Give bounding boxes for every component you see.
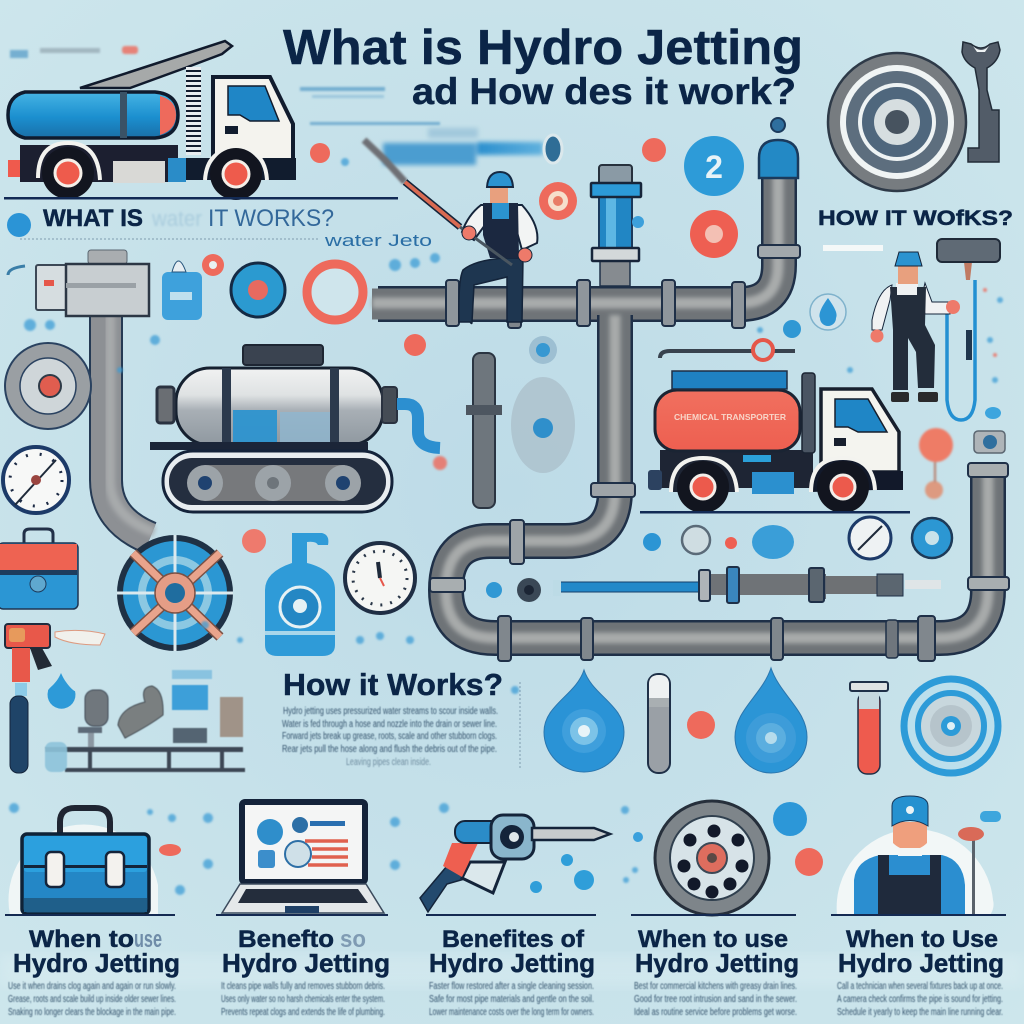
lamp pole	[972, 840, 975, 915]
tank blue band lower	[280, 412, 330, 443]
red dot	[404, 334, 426, 356]
cap badge	[906, 806, 914, 814]
icon: red badge	[795, 848, 823, 876]
ghost fitting	[511, 377, 575, 473]
red block	[443, 843, 478, 877]
face	[893, 822, 927, 850]
tank label: CHEMICAL TRANSPORTER	[674, 412, 786, 422]
legs	[459, 258, 523, 324]
joint	[581, 618, 593, 660]
exhaust pole	[802, 373, 815, 453]
faint header notes	[10, 48, 440, 125]
joint	[886, 620, 898, 658]
ground line	[4, 197, 398, 200]
card 4 heading: Hydro Jetting	[635, 948, 799, 978]
title: What is Hydro Jetting	[283, 21, 803, 75]
small icons along pipe	[242, 517, 952, 602]
card 5 heading: When to Use	[846, 926, 998, 953]
tracks outer	[163, 451, 392, 512]
section heading: it works: water	[151, 206, 202, 231]
how it works body: Leaving pipes clean inside.	[346, 757, 431, 768]
scattered small specks	[9, 158, 1003, 895]
joint	[510, 520, 524, 564]
card 4 heading: When to use	[638, 926, 788, 953]
truck blue box	[168, 158, 186, 182]
joint	[771, 618, 783, 660]
truck: red tanker	[640, 340, 910, 514]
tank blue band	[233, 410, 277, 443]
tank rail	[150, 442, 368, 450]
icon: blue bag	[162, 261, 202, 320]
pressure gauge	[345, 543, 415, 613]
title	[283, 21, 803, 112]
bottle stripe	[265, 631, 335, 635]
barrel	[532, 828, 610, 840]
pipe: left descending	[106, 310, 154, 538]
gauge ring	[682, 526, 710, 554]
cab floor	[815, 471, 903, 490]
blue panel top	[172, 670, 212, 679]
flange	[577, 280, 590, 326]
icon: blue dial	[231, 263, 285, 317]
small drop	[783, 320, 801, 338]
globe icon	[7, 213, 31, 237]
hose end	[544, 135, 562, 163]
top fitting	[974, 431, 1005, 453]
hand right	[946, 300, 960, 314]
how it works body: Hydro jetting uses pressurized water streams to scour inside walls.	[283, 706, 498, 717]
bottom band	[24, 898, 147, 912]
blue outlet	[397, 404, 440, 448]
card 4 body: Good for tree root intrusion and sand in the sewer.	[634, 994, 797, 1005]
blue dot left	[486, 582, 502, 598]
hammer head	[937, 239, 1000, 262]
big metal wheel left	[5, 343, 91, 429]
workbench with parts	[45, 670, 245, 772]
spray lance inside loop	[553, 567, 941, 603]
icon: blue badge 2	[684, 136, 744, 196]
part stem	[88, 733, 94, 747]
hand right	[518, 248, 532, 262]
latch	[46, 852, 64, 887]
card 1 heading: When to	[29, 926, 134, 953]
bottle label	[280, 587, 320, 627]
white halo	[8, 824, 158, 915]
handle	[420, 866, 468, 912]
valve wheel	[117, 535, 233, 651]
scattered red specks	[122, 46, 997, 470]
compressor machine	[8, 250, 149, 316]
card 4 body	[634, 981, 797, 1018]
card 3 body: Faster flow restored after a single cleaning session.	[429, 981, 594, 992]
wheel	[817, 461, 869, 513]
boots	[918, 392, 938, 402]
cap	[895, 252, 922, 266]
how it works body	[282, 706, 498, 768]
gauge left	[3, 447, 69, 513]
blue lens	[529, 336, 557, 364]
card 2: laptop	[222, 802, 384, 913]
icon: large drop left	[544, 670, 624, 772]
card 2 body: Uses only water so no harsh chemicals enter the system.	[221, 994, 385, 1005]
tank strap	[120, 92, 127, 138]
blue leaf	[752, 525, 794, 559]
small blue drop	[632, 216, 644, 228]
head	[898, 266, 918, 284]
blue vertical pipe	[599, 190, 632, 250]
tank top rail	[672, 371, 787, 389]
truck chassis	[20, 145, 178, 182]
track center	[205, 465, 345, 501]
lance red	[405, 182, 460, 227]
screen circle 2	[292, 817, 308, 833]
card 4: wheel	[655, 801, 769, 915]
screen	[242, 802, 365, 882]
card 2 body: It cleans pipe walls fully and removes stubborn debris.	[221, 981, 385, 992]
card 5 heading: Hydro Jetting	[838, 948, 1004, 978]
cab	[821, 389, 899, 472]
blue collar	[591, 183, 641, 197]
icon: red dot	[310, 143, 330, 163]
blue strip	[743, 455, 771, 462]
card 1 heading: use	[134, 926, 162, 953]
blue pipe highlight	[606, 192, 616, 248]
pipe system: main horizontal and right elbow	[372, 118, 800, 328]
truck boom	[80, 41, 232, 88]
icon: red badge	[539, 182, 577, 220]
card 2 body: Prevents repeat clogs and extends the life of plumbing.	[221, 1007, 385, 1018]
icon: large red ring	[307, 264, 363, 320]
overalls	[890, 287, 935, 390]
water jets label: water Jeto	[324, 231, 432, 250]
icon: red dot	[642, 138, 666, 162]
front arch	[811, 458, 875, 492]
end cap	[157, 387, 174, 423]
how it works body: Forward jets break up grease, roots, scale and other stubborn clogs.	[282, 731, 497, 742]
toolbox red	[0, 529, 78, 609]
blue lens core	[536, 343, 550, 357]
baseline rules	[5, 914, 1006, 916]
left arm	[872, 285, 892, 330]
flange	[446, 280, 459, 326]
card 1 body: Use it when drains clog again and again or run slowly.	[8, 981, 176, 992]
wrench tool	[962, 42, 1000, 162]
card 2 heading: so	[340, 926, 366, 953]
card 1 body	[8, 981, 176, 1018]
card 1 body: Grease, roots and scale build up inside older sewer lines.	[8, 994, 176, 1005]
worker standing	[870, 239, 1000, 420]
gauges and parts mid	[466, 353, 575, 508]
lever	[660, 351, 795, 358]
how it works label: HOW IT WOfKS?	[818, 207, 1013, 230]
white halo	[837, 829, 994, 915]
hand rail	[243, 345, 323, 365]
worker seated with lance	[364, 140, 537, 324]
cab floor	[186, 158, 296, 180]
card 2 heading: Hydro Jetting	[222, 948, 390, 978]
blue panel	[172, 685, 208, 710]
strap right	[330, 368, 339, 445]
front arch	[205, 149, 267, 180]
dotted divider	[519, 682, 521, 770]
latch	[106, 852, 124, 887]
truck cab	[213, 77, 293, 178]
neck	[898, 848, 922, 856]
red dot	[242, 529, 266, 553]
cap tip	[771, 118, 785, 132]
body	[455, 821, 505, 843]
card 3 heading	[429, 926, 595, 978]
pipe cap right	[759, 140, 798, 178]
card 2 heading: Benefto	[238, 926, 334, 953]
flange	[662, 280, 675, 326]
cab window	[228, 86, 279, 121]
white trigger guard	[462, 862, 505, 893]
base	[222, 884, 384, 913]
truck wheel rear	[42, 147, 94, 199]
hand left	[870, 330, 884, 342]
track wheel	[325, 465, 361, 501]
card 4 body: Ideal as routine service before problems get worse.	[634, 1007, 797, 1018]
card 3 body: Lower maintenance costs over the long term for owners.	[429, 1007, 594, 1018]
joint	[918, 616, 935, 661]
flange	[508, 282, 521, 328]
wheel	[677, 461, 729, 513]
icon: gray plug	[648, 674, 670, 773]
section heading: it works	[151, 205, 334, 232]
boots	[891, 392, 909, 402]
section heading: what is: WHAT IS	[43, 205, 143, 232]
bottle mark	[293, 599, 307, 613]
gauge	[849, 517, 891, 559]
card 1 heading	[13, 926, 180, 978]
blue capsule	[980, 811, 1001, 822]
box	[22, 834, 149, 914]
blue dot	[643, 533, 661, 551]
red badge inner	[705, 225, 723, 243]
shirt	[896, 283, 918, 295]
card 3 heading: Benefites of	[442, 926, 585, 953]
strap left	[222, 368, 231, 445]
head	[491, 815, 534, 859]
screen box	[258, 850, 275, 868]
screen flag	[285, 841, 311, 867]
ghost fitting core	[533, 418, 553, 438]
part	[85, 690, 108, 726]
pipe collar right	[758, 245, 800, 258]
card 1 body: Snaking no longer clears the blockage in the main pipe.	[8, 1007, 176, 1018]
truck tank	[8, 92, 178, 138]
ground line	[640, 511, 910, 514]
right arm	[921, 283, 950, 314]
flange	[732, 282, 745, 328]
ring	[517, 578, 541, 602]
seam	[24, 865, 147, 868]
blue disc	[912, 518, 952, 558]
icon: large drop right	[735, 668, 807, 773]
card 1 heading: Hydro Jetting	[13, 948, 180, 978]
tank body	[176, 368, 383, 445]
card 4 body: Best for commercial kitchens with greasy drain lines.	[634, 981, 797, 992]
screen stripes	[305, 841, 348, 865]
small blue dot	[633, 832, 643, 842]
card 5 heading	[838, 926, 1004, 978]
concentric valve disc	[828, 53, 966, 191]
hose	[947, 280, 975, 420]
blurred hose behind worker	[383, 128, 543, 165]
bench end	[45, 742, 67, 772]
hammer handle	[964, 262, 972, 280]
face	[490, 185, 508, 203]
small red	[725, 537, 737, 549]
truck ladder	[186, 67, 201, 155]
truck side box	[113, 161, 165, 183]
lance nozzle	[364, 140, 405, 182]
end cap right	[382, 387, 397, 423]
track wheel	[187, 465, 223, 501]
icon: red badge	[690, 210, 738, 258]
notch	[285, 906, 319, 913]
tank	[655, 390, 800, 451]
fitting collar	[466, 405, 502, 415]
icon: red dot small	[687, 711, 715, 739]
tracks inner	[169, 458, 386, 505]
rear arch	[38, 143, 100, 180]
silver tank on tracks	[150, 345, 440, 512]
icon: blue badge 2: 2	[705, 149, 723, 185]
bench top	[45, 747, 243, 752]
rear arch	[671, 458, 737, 492]
card 5 body	[837, 981, 1003, 1018]
handle	[60, 808, 110, 835]
subtitle: ad How des it work?	[412, 71, 796, 112]
cap	[892, 796, 928, 826]
section heading: it works: IT WORKS?	[208, 205, 334, 232]
box	[220, 697, 243, 737]
screen circle	[257, 819, 283, 845]
joint	[430, 578, 465, 592]
ring core	[524, 585, 534, 595]
vertical fitting	[473, 353, 495, 508]
icon: drop	[47, 673, 76, 709]
lid	[24, 836, 147, 872]
truck wheel front	[210, 148, 262, 200]
cap	[487, 172, 513, 187]
rear lights	[648, 470, 662, 490]
joint top	[968, 463, 1008, 477]
lance tip	[460, 227, 512, 265]
how it works body: Rear jets pull the hose along and flush the debris out of the pipe.	[282, 744, 497, 755]
truck: blue tanker	[8, 41, 296, 200]
part	[118, 686, 163, 738]
icon: blue ring	[904, 679, 998, 773]
icon: red capsule	[850, 682, 888, 774]
card 3 body	[429, 981, 594, 1018]
card 3 heading: Hydro Jetting	[429, 948, 595, 978]
lever loop	[753, 340, 773, 360]
head eye	[500, 825, 524, 849]
top fitting eye	[983, 435, 997, 449]
thin hose line	[823, 245, 883, 251]
pipe system: vertical and lower loop	[430, 165, 1009, 661]
overalls	[878, 855, 941, 915]
icon: water drop	[810, 294, 846, 330]
soft band behind card text	[0, 955, 1024, 987]
lamp head	[958, 827, 984, 841]
red leaf	[159, 844, 181, 856]
head eye core	[509, 832, 519, 842]
card 5: technician	[837, 796, 994, 915]
gauge needle	[858, 526, 882, 550]
card headings and body	[8, 926, 1004, 1018]
arms	[462, 205, 537, 250]
spray gun left	[5, 624, 105, 773]
bench bottom	[65, 768, 245, 772]
how it works body: Water is fed through a hose and nozzle into the drain or sewer line.	[282, 719, 497, 730]
chassis	[660, 450, 813, 488]
blue box	[752, 472, 794, 494]
card 3 body: Safe for most pipe materials and gentle on the soil.	[429, 994, 594, 1005]
keyboard	[238, 889, 368, 903]
how it works heading: How it Works?	[283, 667, 503, 702]
collar lower	[591, 483, 635, 497]
cab handle	[225, 126, 238, 134]
icon: drops near gun	[530, 854, 594, 893]
spray bottle	[265, 533, 335, 656]
card 4 heading	[635, 926, 799, 978]
joint	[968, 577, 1009, 590]
card 2 heading	[222, 926, 390, 978]
part stand	[78, 727, 102, 733]
white collar	[592, 248, 639, 261]
icon: blue badge	[773, 802, 807, 836]
vertical stub above main pipe	[600, 258, 630, 286]
blue tip	[985, 407, 1001, 419]
card 1: toolbox	[8, 808, 158, 915]
window	[835, 399, 887, 432]
joint	[498, 616, 511, 661]
top cap	[599, 165, 632, 185]
wand	[966, 330, 972, 360]
dotted rule	[20, 238, 320, 240]
card 3: spray gun	[420, 815, 610, 912]
box small	[173, 728, 207, 743]
body	[854, 855, 965, 915]
screen bar	[310, 821, 345, 826]
disc core	[925, 531, 939, 545]
lance shaft	[405, 182, 460, 227]
chest	[492, 203, 509, 219]
main pipe flange over vertical	[577, 280, 590, 326]
hand left	[462, 226, 476, 240]
track wheel	[255, 465, 291, 501]
card 2 body	[221, 981, 385, 1018]
bench legs	[90, 751, 222, 770]
tank red end	[160, 96, 176, 135]
overalls	[483, 203, 519, 258]
red tool right	[919, 428, 953, 499]
icon: red ring small	[202, 254, 224, 276]
handle	[834, 438, 846, 446]
rear light	[8, 160, 20, 177]
